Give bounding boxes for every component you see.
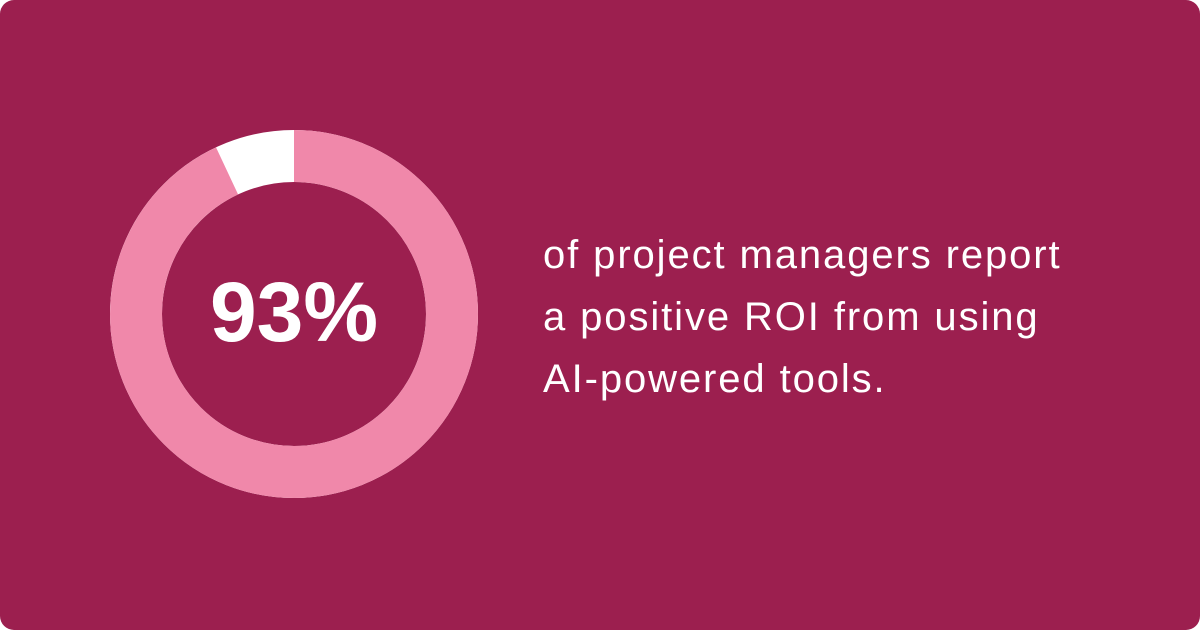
description text: a positive ROI from using [543,295,1040,339]
description text: of project managers report [543,233,1062,277]
description text [543,233,1062,401]
description text: AI-powered tools. [543,357,887,401]
big percentage: 93% [210,265,378,359]
